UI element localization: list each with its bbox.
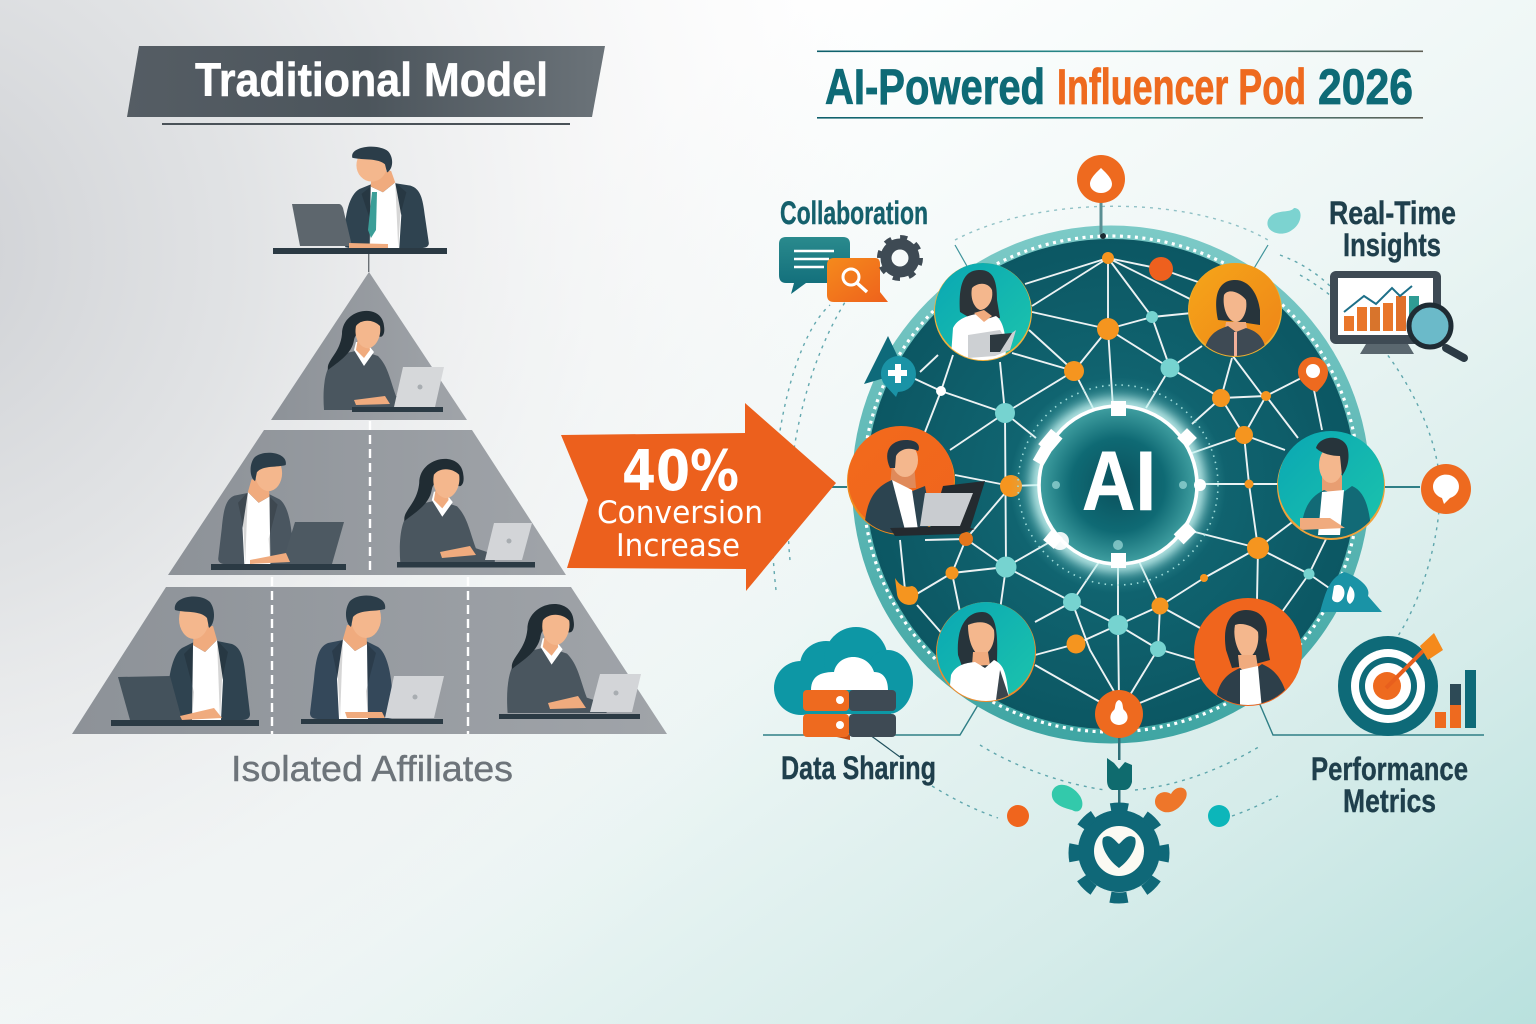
ring pin: plus [864, 336, 916, 397]
node: top orange pin [1077, 155, 1125, 234]
icon: cloud [774, 627, 913, 715]
figure: man with dark laptop [211, 453, 346, 570]
connector: leader to pyramid [368, 254, 369, 272]
avatar: man with laptop [847, 426, 985, 540]
title: AI-Powered Influencer Pod 2026 [817, 50, 1423, 119]
pyramid tier 3 [72, 577, 667, 734]
node: bottom orange pin [1095, 690, 1143, 738]
pyramid tier 2 [168, 421, 566, 575]
ring pin: teal refresh cloud [1320, 572, 1382, 612]
panel: traditional model [72, 46, 667, 789]
ring pin: orange leaf [895, 578, 918, 605]
pyramid tier 1 [271, 272, 467, 420]
top leader figure at desk [273, 147, 447, 254]
pale teal leaf [1267, 208, 1301, 234]
figure: woman with light laptop [397, 459, 535, 568]
white dotted ring [863, 236, 1359, 732]
dashed dividers [272, 577, 468, 734]
heading banner: Traditional Model: Traditional Model [195, 53, 548, 106]
icon: target [1338, 633, 1443, 736]
icon: gear with heart [1074, 808, 1164, 898]
avatar: woman red-orange [1194, 598, 1302, 710]
figure: woman right [499, 604, 641, 719]
arrow callout: 40% conversion increase [561, 403, 836, 591]
label and icon: real-time insights [1329, 195, 1464, 358]
label and icon: performance metrics: Performance [1311, 751, 1468, 787]
AI core: AI [1082, 434, 1156, 528]
AI core [1010, 377, 1226, 593]
icon: monitor with chart [1330, 271, 1441, 354]
outer teal ring [852, 226, 1370, 744]
dashed divider [369, 421, 371, 575]
label and icon: collaboration [779, 195, 928, 302]
label and icon: performance metrics: Metrics [1343, 783, 1436, 819]
network edges [900, 258, 1332, 705]
figure: man left [111, 596, 259, 726]
ring pin: top marker dot [1100, 233, 1106, 239]
caption: Isolated Affiliates: Isolated Affiliates [231, 748, 513, 789]
label and icon: real-time insights: Real-Time [1329, 195, 1456, 231]
arrow callout: 40% conversion increase: 40% [622, 439, 739, 504]
arrow callout: 40% conversion increase: Increase [616, 528, 740, 564]
base lines under side icons [763, 245, 1484, 735]
network nodes [936, 252, 1314, 657]
label and icon: data sharing [774, 627, 936, 786]
icon: chat bubble [779, 237, 850, 294]
node: right orange pin [1421, 464, 1471, 514]
avatar: woman white blouse [936, 602, 1036, 706]
icon: bars [1435, 670, 1476, 728]
dark network disc [866, 239, 1356, 729]
figure: man centre [301, 595, 444, 724]
label and icon: real-time insights: Insights [1343, 227, 1441, 263]
bottom connector and flag [1107, 738, 1132, 810]
label and icon: collaboration: Collaboration [780, 195, 928, 231]
icon: server stack [803, 690, 900, 757]
heading banner: Traditional Model [127, 46, 605, 125]
panel: AI network hub [847, 226, 1385, 744]
icon: search bubble [827, 258, 888, 302]
avatar: man teal [1277, 431, 1385, 540]
label and icon: data sharing: Data Sharing [781, 750, 936, 786]
label and icon: performance metrics [1311, 633, 1476, 819]
title: AI-Powered Influencer Pod 2026: Influencer Pod [1057, 59, 1306, 115]
ring pin: orange location [1298, 357, 1328, 392]
avatar: woman with tablet [934, 263, 1032, 370]
decorative dots: orange, green, orange, teal [1007, 785, 1230, 827]
arrow callout: 40% conversion increase: Conversion [597, 495, 763, 531]
avatar: woman orange [1188, 263, 1282, 360]
title: AI-Powered Influencer Pod 2026: 2026 [1318, 59, 1413, 115]
title: AI-Powered Influencer Pod 2026: AI-Powered [825, 59, 1045, 115]
icon: gear [880, 238, 920, 278]
icon: magnifying glass [1409, 305, 1464, 358]
dashed orbit lines [772, 206, 1440, 818]
